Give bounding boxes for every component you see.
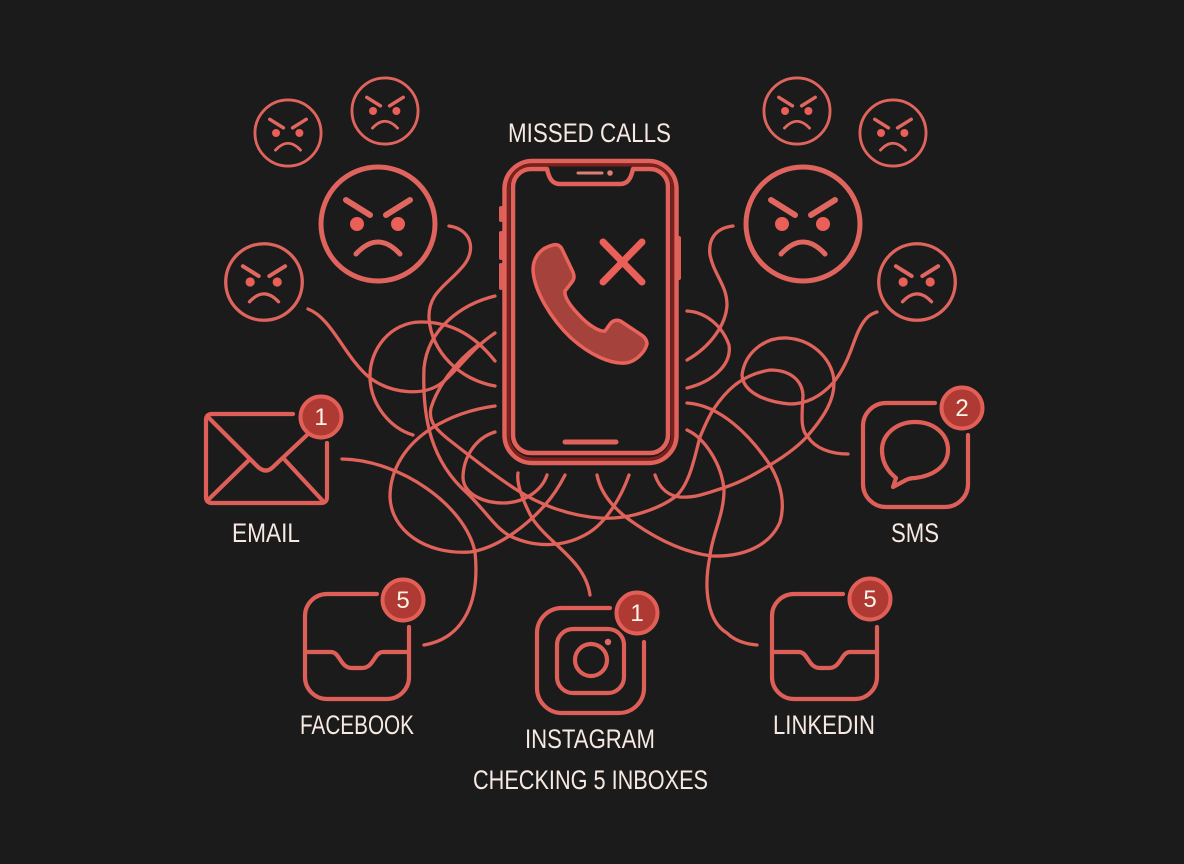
icon: instagram	[537, 592, 658, 713]
label: linkedin: LINKEDIN	[773, 710, 875, 740]
angry face: large left	[321, 167, 435, 281]
icon: linkedin inbox	[772, 578, 890, 699]
phone body	[504, 161, 676, 463]
badge: email count: 1	[314, 404, 328, 431]
caption: checking 5 inboxes: CHECKING 5 INBOXES	[473, 765, 708, 795]
label: sms: SMS	[891, 518, 939, 548]
angry face: top centre left small	[352, 78, 418, 144]
icon: red x	[603, 242, 642, 282]
angry face: top centre right small	[764, 78, 830, 144]
badge: facebook count: 5	[396, 587, 410, 614]
heading: missed calls: MISSED CALLS	[508, 118, 671, 148]
angry face: large right	[746, 167, 860, 281]
tangled lines	[308, 226, 877, 645]
angry face: top left small	[255, 100, 321, 166]
phone	[501, 161, 679, 463]
phone speaker and camera	[578, 170, 613, 176]
angry face: lower left	[226, 244, 302, 320]
badge: sms count: 2	[955, 395, 969, 422]
badge: linkedin count: 5	[863, 586, 877, 613]
icon: email	[206, 396, 342, 503]
phone side buttons	[501, 208, 679, 288]
label: facebook: FACEBOOK	[300, 710, 414, 740]
angry face: lower right	[879, 244, 955, 320]
badge: instagram count: 1	[630, 600, 644, 627]
label: instagram: INSTAGRAM	[525, 724, 655, 754]
icon: missed call handset	[533, 245, 647, 363]
angry face: top right small	[860, 100, 926, 166]
icon: facebook inbox	[305, 580, 424, 699]
phone home bar	[565, 440, 616, 444]
label: email: EMAIL	[232, 518, 300, 548]
icon: sms	[863, 388, 982, 507]
